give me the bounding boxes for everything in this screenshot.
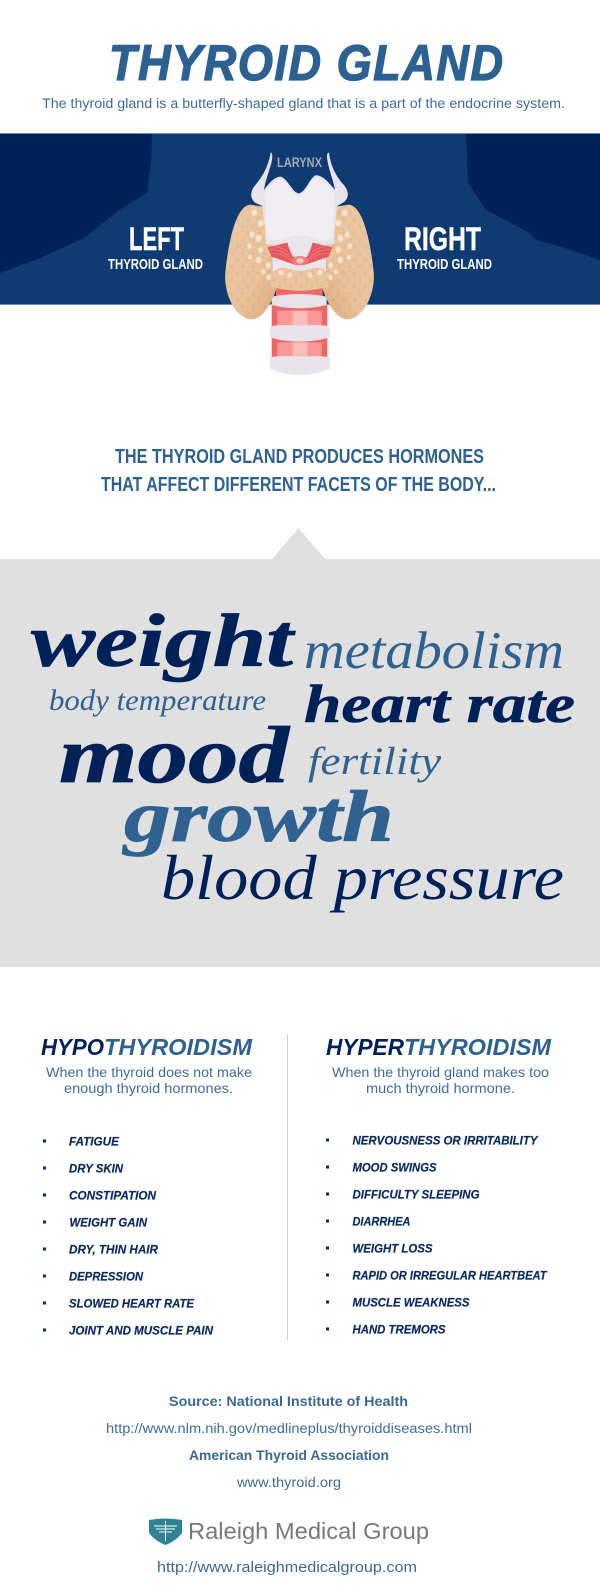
inner airway [273,235,326,272]
heading: hyperthyroidism [326,1034,552,1060]
symptom list: hyperthyroidism: RAPID OR IRREGULAR HEARTBEAT [352,1268,548,1282]
heading: hypothyroidism: THYROIDISM [104,1034,253,1060]
cricothyroid muscles [268,243,332,265]
sources: http://www.nlm.nih.gov/medlineplus/thyroiddiseases.html [106,1421,472,1436]
heading: hyperthyroidism: HYPER [326,1034,404,1060]
symptom list: hyperthyroidism: WEIGHT LOSS [352,1242,432,1256]
word: growth: growth [121,776,394,857]
label: right thyroid gland [397,221,492,273]
isthmus [271,267,328,291]
illustration: thyroid and larynx [225,153,374,375]
right shoulder silhouette [466,134,600,260]
word: metabolism: metabolism [304,622,564,680]
thyroid cartilage [251,153,348,244]
left shoulder silhouette [0,134,152,273]
label: larynx: LARYNX [277,154,323,170]
description: hyperthyroidism: much thyroid hormone. [366,1080,515,1096]
symptom list: hyperthyroidism: DIARRHEA [352,1214,410,1228]
title: THYROID GLAND [109,36,503,92]
label: left thyroid gland: LEFT [129,221,184,257]
symptom list: hyperthyroidism: HAND TREMORS [352,1322,446,1336]
subtitle: The thyroid gland is a butterfly-shaped gland that is a part of the endocrine system. [42,96,565,111]
symptom list: hypothyroidism: FATIGUE [69,1134,120,1148]
word: mood: mood [59,710,291,800]
symptom list: hyperthyroidism: DIFFICULTY SLEEPING [352,1188,480,1202]
symptom list: hypothyroidism: DRY, THIN HAIR [69,1242,158,1256]
description: hyperthyroidism [332,1064,549,1096]
section heading: THE THYROID GLAND PRODUCES HORMONES [115,445,484,468]
right thyroid lobe [316,205,374,319]
left thyroid lobe [225,205,283,319]
website url: http://www.raleighmedicalgroup.com [157,1559,417,1576]
panel: hyperthyroidism [326,1034,552,1336]
description: hyperthyroidism: When the thyroid gland makes too [332,1064,549,1080]
symptom list: hypothyroidism: SLOWED HEART RATE [69,1296,195,1310]
description: hypothyroidism: enough thyroid hormones. [64,1080,233,1096]
label: left thyroid gland [108,221,203,273]
word: blood pressure: blood pressure [161,843,564,913]
word: fertility: fertility [308,740,442,783]
description: hypothyroidism: When the thyroid does not make [46,1064,252,1080]
symptom list: hyperthyroidism: MOOD SWINGS [352,1160,436,1174]
section heading [101,445,496,496]
icon: shield with caduceus [149,1518,182,1545]
word: body temperature: body temperature [49,685,266,717]
logo: Raleigh Medical Group: Raleigh Medical Group [188,1518,429,1544]
sources [106,1394,472,1490]
panel: hypothyroidism [41,1034,253,1338]
word: heart rate: heart rate [304,674,575,734]
symptom list: hypothyroidism: WEIGHT GAIN [70,1216,147,1230]
heading: hypothyroidism: HYPO [41,1034,104,1060]
sources: www.thyroid.org [236,1475,341,1490]
section heading: THAT AFFECT DIFFERENT FACETS OF THE BODY... [101,473,496,496]
sources: American Thyroid Association [189,1448,389,1463]
panel: word cloud [0,528,600,967]
symptom list: hypothyroidism: DRY SKIN [69,1162,123,1176]
symptom list: hyperthyroidism: NERVOUSNESS OR IRRITABILITY [352,1134,538,1148]
description: hypothyroidism [46,1064,252,1096]
label: left thyroid gland: THYROID GLAND [108,256,203,273]
word: weight: weight [31,600,296,683]
symptom list: hypothyroidism: CONSTIPATION [69,1188,156,1202]
symptom list: hyperthyroidism: MUSCLE WEAKNESS [352,1296,470,1310]
symptom list: hyperthyroidism [326,1134,548,1336]
trachea [270,287,330,375]
symptom list: hypothyroidism [43,1134,213,1338]
label: right thyroid gland: RIGHT [404,221,481,257]
symptom list: hypothyroidism: JOINT AND MUSCLE PAIN [69,1324,213,1338]
label: right thyroid gland: THYROID GLAND [397,256,492,273]
sources: Source: National Institute of Health [169,1394,408,1409]
panel: neck anatomy band [0,133,600,305]
heading: hypothyroidism [41,1034,253,1060]
symptom list: hypothyroidism: DEPRESSION [69,1270,143,1284]
heading: hyperthyroidism: THYROIDISM [404,1034,552,1060]
